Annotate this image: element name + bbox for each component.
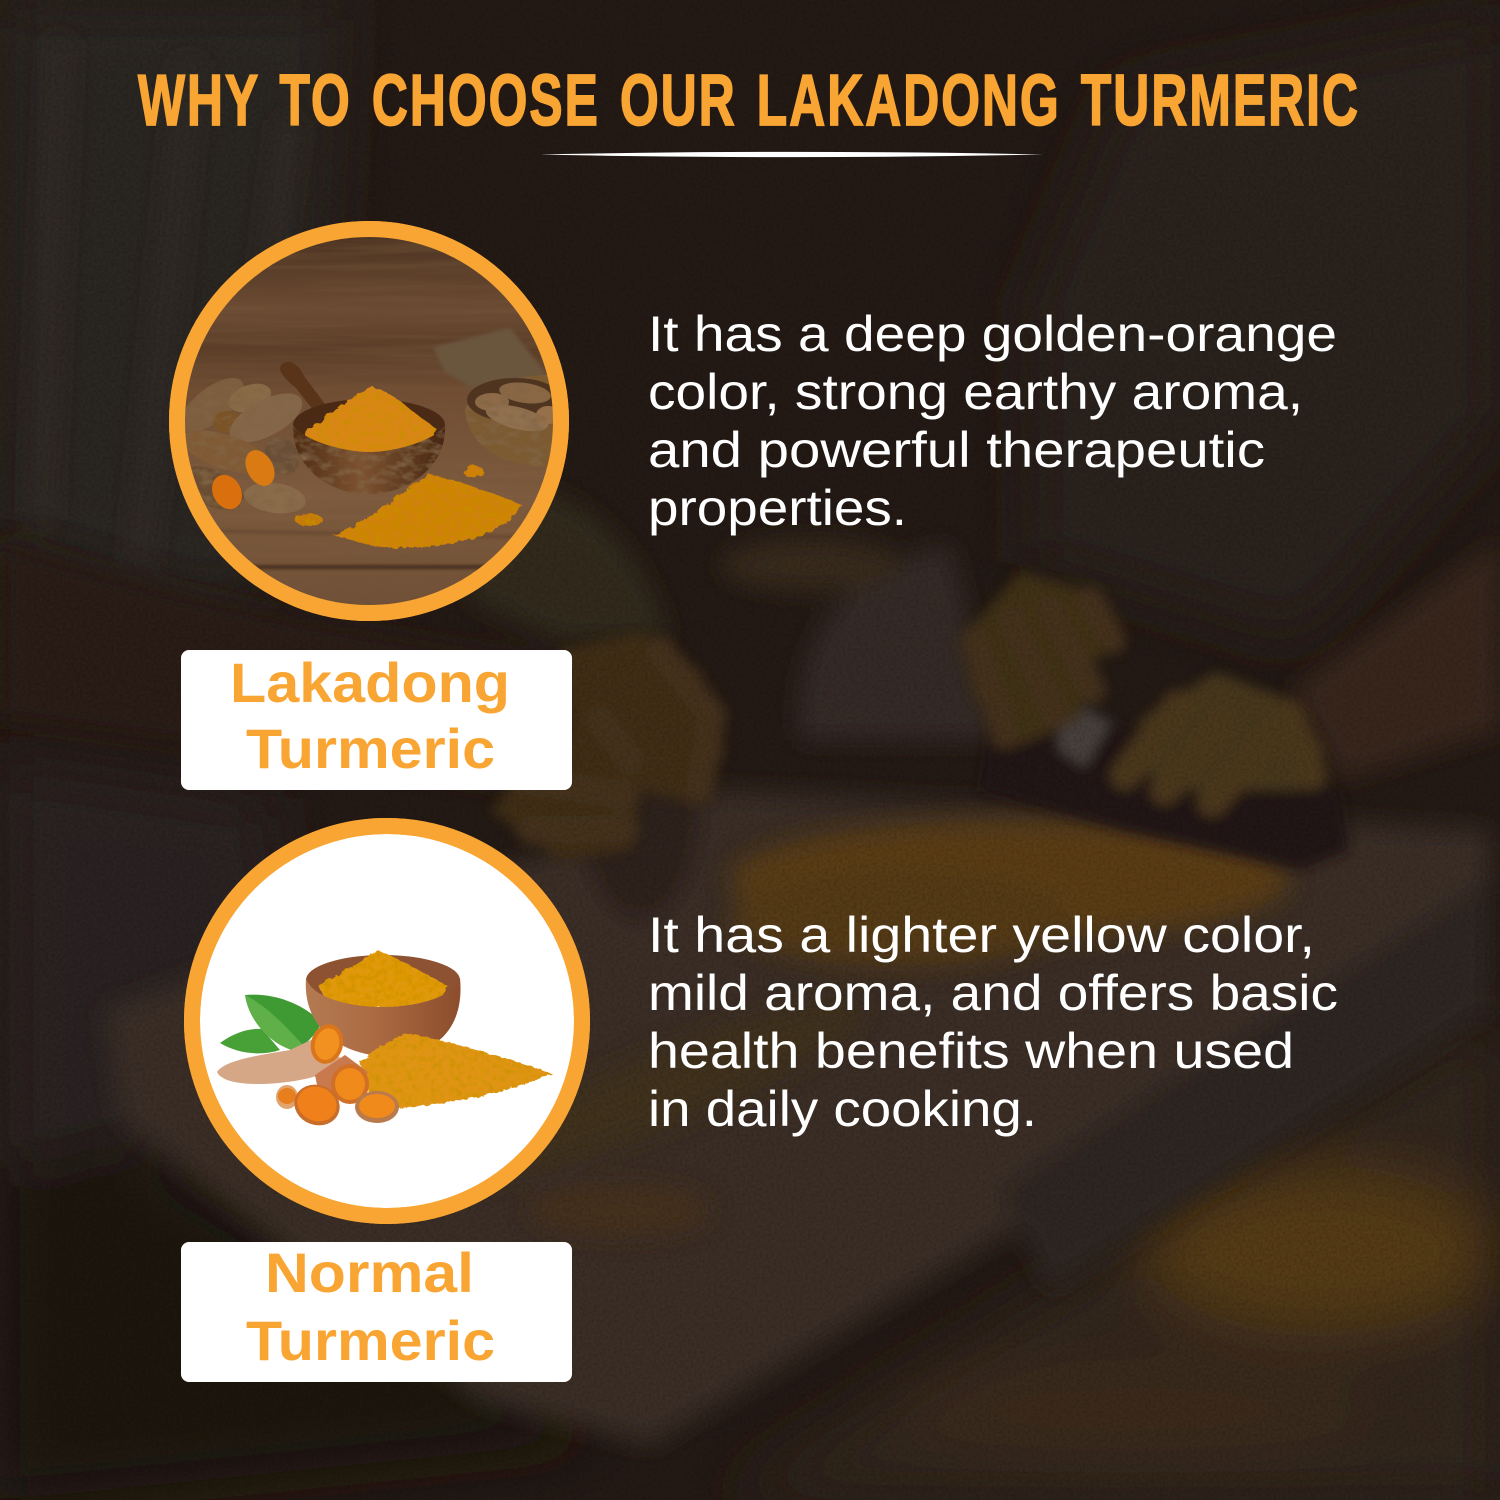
bowl back (293, 400, 445, 436)
circular photo: Lakadong turmeric (172, 229, 563, 613)
sack (434, 328, 546, 386)
loose powder pile (295, 466, 522, 548)
text block: Lakadong description (648, 306, 1337, 536)
left arm (0, 540, 600, 800)
centre knee (799, 545, 1000, 740)
label box: Normal Turmeric: Normal (265, 1241, 474, 1304)
hand centre (960, 572, 1120, 745)
text block: Lakadong description: properties. (648, 480, 907, 536)
text block: normal turmeric description: in daily cooking. (648, 1081, 1037, 1137)
slices (276, 1021, 399, 1132)
title underline (540, 152, 1043, 157)
pestle (980, 710, 1350, 870)
hand right (1140, 672, 1325, 790)
text block: normal turmeric description: It has a lighter yellow color, (648, 907, 1315, 963)
bowl front (306, 978, 461, 1056)
text block: Lakadong description: It has a deep golden-orange (648, 306, 1337, 362)
right arm (1290, 540, 1500, 780)
text block: normal turmeric description: health benefits when used (648, 1023, 1294, 1079)
text block: Lakadong description: and powerful therapeutic (648, 422, 1265, 478)
left knee (440, 478, 670, 640)
text block: normal turmeric description (648, 907, 1338, 1137)
bowl powder (304, 387, 436, 455)
label box: Lakadong Turmeric: Lakadong (230, 651, 510, 714)
second root (315, 1055, 368, 1100)
label box: Lakadong Turmeric: Turmeric (246, 717, 495, 780)
label box: Normal Turmeric (181, 1241, 572, 1382)
shirt folds (40, 40, 290, 560)
basket (465, 375, 553, 468)
root (217, 1038, 343, 1084)
bowl powder (318, 951, 447, 1008)
bowl behind (720, 539, 900, 591)
loose powder pile (360, 1033, 553, 1108)
roots pile (185, 378, 306, 514)
bowl front (293, 425, 445, 494)
circular photo: normal turmeric (192, 826, 582, 1216)
label box: Normal Turmeric: Turmeric (246, 1309, 495, 1372)
cut root ends (212, 450, 274, 510)
stone block (580, 700, 700, 920)
text block: Lakadong description: color, strong earthy aroma, (648, 364, 1303, 420)
leaves (220, 995, 322, 1053)
bowl back (306, 955, 460, 996)
text block: normal turmeric description: mild aroma, and offers basic (648, 965, 1338, 1021)
stone slab (105, 790, 1490, 1445)
hand left (490, 632, 725, 860)
label box: Lakadong Turmeric (181, 650, 572, 790)
spoon (280, 362, 325, 408)
